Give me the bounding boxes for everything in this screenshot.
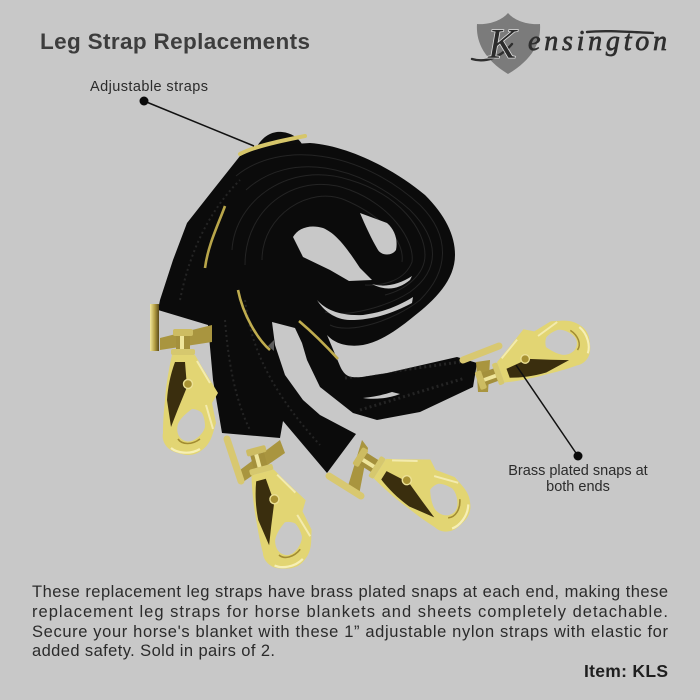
gaps between strap layers <box>317 276 413 399</box>
top buckle strap loop <box>255 132 302 150</box>
callout label: Brass plated snaps at <box>508 463 648 479</box>
gold top buckle <box>240 136 305 154</box>
description text: replacement leg straps for horse blankets and sheets completely detachable. <box>32 603 668 621</box>
item code: Item: KLS <box>584 661 668 681</box>
logo: Kensington <box>472 13 667 74</box>
strap weave contours <box>180 155 465 445</box>
gold adjuster ring 2 <box>238 290 270 350</box>
gold adjuster ring 1 <box>205 206 225 268</box>
logo wordmark: ensington <box>528 26 667 57</box>
callout label: Adjustable straps <box>90 79 208 95</box>
description text: added safety. Sold in pairs of 2. <box>32 642 275 660</box>
logo initial: K <box>487 22 518 68</box>
callout dot <box>140 96 148 106</box>
product photo: leg straps <box>150 132 597 574</box>
description text: These replacement leg straps have brass plated snaps at each end, making these <box>32 583 668 601</box>
description text: Secure your horse's blanket with these 1” adjustable nylon straps with elastic for <box>32 623 668 641</box>
snap 2 with bar <box>227 438 322 574</box>
title: Leg Strap Replacements <box>40 29 310 54</box>
loop opening, small <box>360 213 397 254</box>
callout: brass plated snaps <box>508 365 648 495</box>
loop opening, large <box>293 226 372 281</box>
grey leather tab <box>268 340 274 351</box>
callout leader <box>516 365 578 456</box>
snap 1 with bar <box>150 304 218 455</box>
callout: adjustable straps <box>90 79 254 146</box>
logo shield <box>477 13 540 74</box>
snap 3 with bar <box>329 426 483 539</box>
logo swash <box>472 31 653 60</box>
gold adjuster ring 3 <box>299 321 338 359</box>
callout leader <box>144 101 254 146</box>
straps silhouette <box>158 143 477 473</box>
description text <box>32 583 668 660</box>
callout label: both ends <box>546 479 610 495</box>
callout dot <box>574 452 582 460</box>
snap 4 with bar <box>463 309 597 399</box>
